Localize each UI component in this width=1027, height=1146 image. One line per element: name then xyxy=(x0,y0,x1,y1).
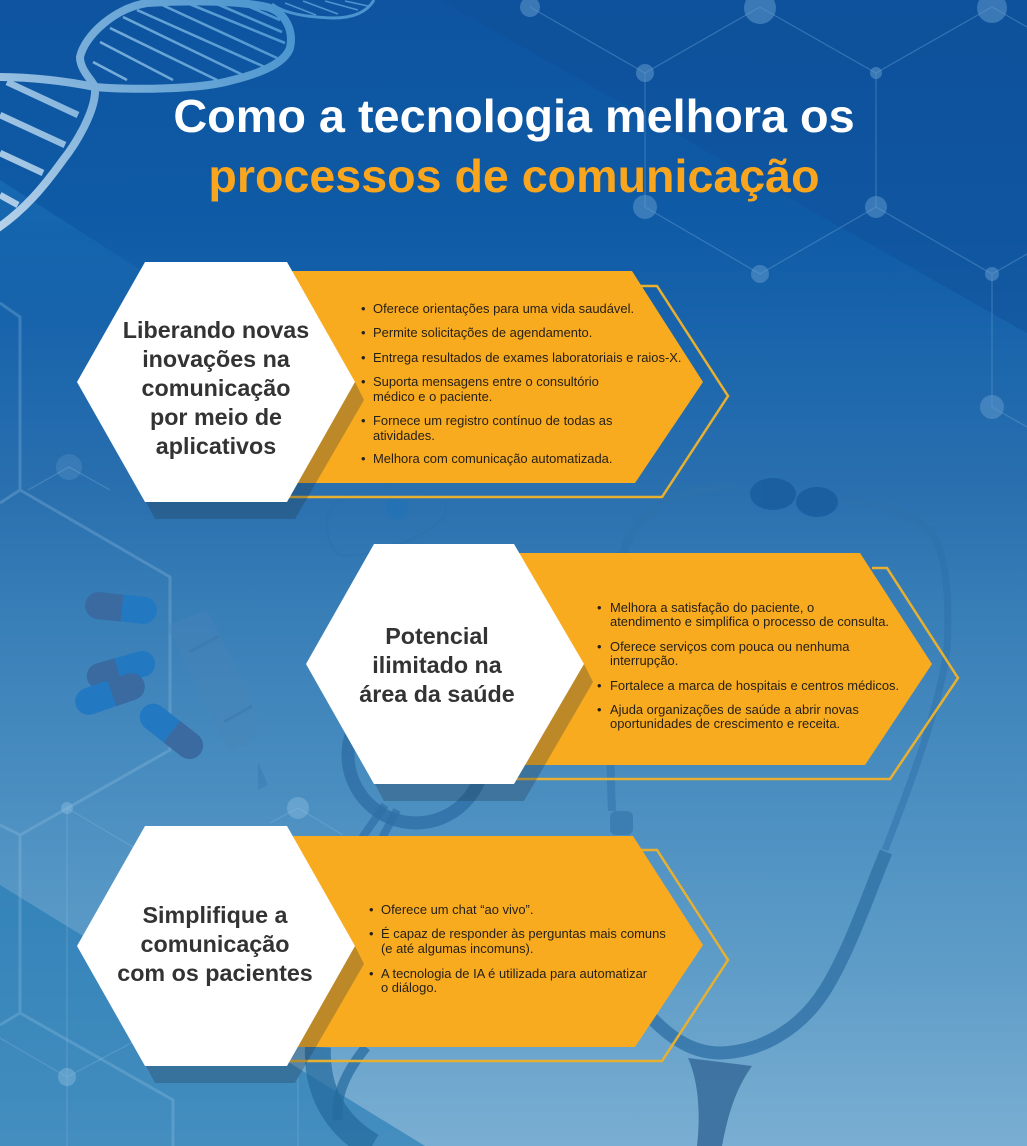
bullet list: É capaz de responder às perguntas mais comuns xyxy=(381,926,666,941)
bullet list: • xyxy=(361,451,366,466)
hexagon heading xyxy=(123,317,309,459)
bullet list: atendimento e simplifica o processo de consulta. xyxy=(610,614,889,629)
hexagon heading xyxy=(359,623,515,707)
bullet list xyxy=(597,600,899,731)
icon: DNA helix xyxy=(0,0,374,230)
panel: simplifique xyxy=(77,826,728,1083)
hexagon heading: Potencial xyxy=(385,623,489,649)
bullet list: Ajuda organizações de saúde a abrir novas xyxy=(610,702,859,717)
outline arrow xyxy=(285,850,728,1061)
bullet list: • xyxy=(361,374,366,389)
bullet list: Fortalece a marca de hospitais e centros médicos. xyxy=(610,678,899,693)
title: processos de comunicação xyxy=(208,150,820,202)
title xyxy=(173,90,855,202)
outline arrow xyxy=(285,286,728,497)
bullet list: Oferece serviços com pouca ou nenhuma xyxy=(610,639,850,654)
orange arrow xyxy=(513,553,932,765)
bullet list: Melhora com comunicação automatizada. xyxy=(373,451,612,466)
hexagon heading: ilimitado na xyxy=(372,652,503,678)
bullet list: Oferece orientações para uma vida saudável. xyxy=(373,301,634,316)
bullet list xyxy=(361,301,682,466)
hexagon heading: aplicativos xyxy=(156,433,276,459)
bullet list: Permite solicitações de agendamento. xyxy=(373,325,592,340)
medicine bottle xyxy=(166,610,268,790)
orange arrow xyxy=(285,271,703,483)
hexagon xyxy=(306,544,584,784)
panel: potencial xyxy=(306,544,958,801)
hexagon heading: inovações na xyxy=(142,346,291,372)
hexagon heading: comunicação xyxy=(141,931,289,957)
pills xyxy=(72,591,208,764)
hexagon xyxy=(77,262,355,502)
bullet list: • xyxy=(361,301,366,316)
bullet list: médico e o paciente. xyxy=(373,389,492,404)
bullet list: A tecnologia de IA é utilizada para automatizar xyxy=(381,966,648,981)
hexagon shadow xyxy=(146,382,364,519)
earpieces xyxy=(750,478,838,517)
molecule network top right xyxy=(520,0,1027,427)
hexagon heading xyxy=(117,902,313,986)
bullet list xyxy=(369,902,666,995)
bullet list: • xyxy=(361,413,366,428)
bullet list: Melhora a satisfação do paciente, o xyxy=(610,600,814,615)
bullet list: interrupção. xyxy=(610,653,678,668)
bullet list: • xyxy=(369,966,374,981)
bullet list: • xyxy=(597,678,602,693)
faint capsule behind panel xyxy=(327,487,446,555)
bullet list: • xyxy=(597,702,602,717)
hexagon heading: comunicação xyxy=(142,375,290,401)
hexagon heading: Liberando novas xyxy=(123,317,309,343)
hexagon heading: com os pacientes xyxy=(117,960,313,986)
bullet list: • xyxy=(361,325,366,340)
title: Como a tecnologia melhora os xyxy=(173,90,855,142)
hexagon heading: Simplifique a xyxy=(143,902,289,928)
bullet list: Oferece um chat “ao vivo”. xyxy=(381,902,533,917)
bullet list: atividades. xyxy=(373,428,435,443)
molecule network left xyxy=(0,303,343,1146)
bullet list: • xyxy=(597,600,602,615)
hexagon heading: área da saúde xyxy=(359,681,515,707)
bullet list: • xyxy=(369,926,374,941)
stethoscope xyxy=(318,478,948,1146)
hexagon xyxy=(77,826,355,1066)
bullet list: Fornece um registro contínuo de todas as xyxy=(373,413,612,428)
hexagon shadow xyxy=(146,946,364,1083)
bullet list: Entrega resultados de exames laboratoriais e raios-X. xyxy=(373,350,682,365)
orange arrow xyxy=(285,836,703,1047)
bullet list: • xyxy=(369,902,374,917)
bullet list: o diálogo. xyxy=(381,980,437,995)
bullet list: oportunidades de crescimento e receita. xyxy=(610,716,840,731)
bullet list: • xyxy=(597,639,602,654)
bullet list: Suporta mensagens entre o consultório xyxy=(373,374,599,389)
outline arrow xyxy=(513,568,958,779)
panel: aplicativos xyxy=(77,262,728,519)
bullet list: • xyxy=(361,350,366,365)
bullet list: (e até algumas incomuns). xyxy=(381,941,533,956)
hexagon heading: por meio de xyxy=(150,404,282,430)
hexagon shadow xyxy=(375,664,593,801)
